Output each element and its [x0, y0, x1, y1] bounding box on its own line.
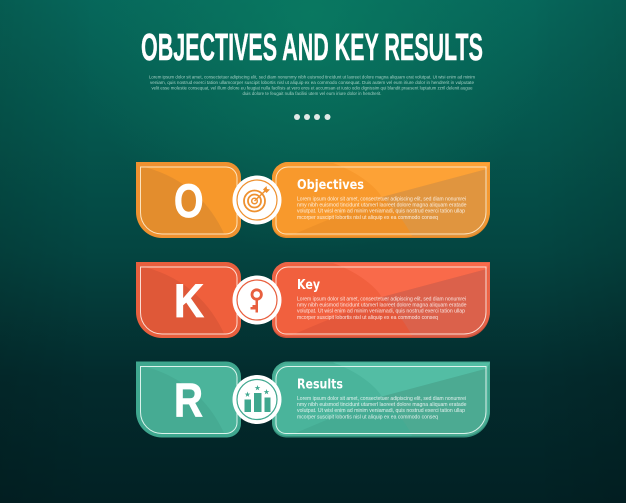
heading: results: Results	[297, 378, 343, 392]
panel: letter R: R	[174, 374, 203, 426]
description: objectives: volutpat. Ut wisl enim ad minim veniamadi, quis nostrud exerci tation ullap	[297, 209, 465, 215]
description: objectives	[297, 196, 466, 221]
description: key: nmy nibh euismod tincidunt utamerl laoreet dolore magna aliquam eratade	[297, 302, 466, 308]
description: results	[297, 396, 466, 420]
description: objectives: nmy nibh euismod tincidunt utamerl laoreet dolore magna aliquam eratade	[297, 202, 466, 208]
pagination dots	[294, 114, 330, 120]
panel: letter R	[136, 362, 241, 438]
panel: objectives description	[272, 162, 490, 238]
description: objectives: mcorper suscipit lobortis nisl ut aliquip ex ea commodo conseq	[297, 215, 438, 221]
icon: target with dart	[232, 176, 282, 224]
description: results: Lorem ipsum dolor sit amet, consectetuer adipiscing elit, sed diam nonumrei	[297, 396, 466, 402]
heading: objectives: Objectives	[297, 178, 364, 193]
intro text block: Lorem ipsum dolor sit amet, consectetuer adipiscing elit, sed diam nonummy nibh euismod tincidunt ut laoreet dolore magna aliquam erat volutpat. Ut wisi enim ad minim	[149, 75, 475, 81]
row: results	[136, 362, 490, 438]
panel: letter K	[136, 262, 241, 338]
description: results: mcorper suscipit lobortis nisl ut aliquip ex ea commodo conseq	[297, 414, 438, 420]
description: key	[297, 296, 466, 321]
intro text block: duis dolore te feugait nulla facilisi utem vel eum iriure dolor in hendrerit.	[242, 91, 382, 97]
panel: letter K: K	[174, 274, 204, 327]
description: key: mcorper suscipit lobortis nisl ut aliquip ex ea commodo conseq	[297, 315, 438, 321]
panel: results description	[272, 362, 490, 438]
row: key	[136, 262, 490, 338]
intro text block: veniam, quis nostrud exerci tation ullamcorper suscipit lobortis nisl ut aliquip ex ea commodo consequat. Duis autem vel eum iriure dolor in hendrerit in vulputate	[150, 80, 474, 86]
description: key: Lorem ipsum dolor sit amet, consectetuer adipiscing elit, sed diam nonumrei	[297, 296, 466, 302]
description: results: volutpat. Ut wisl enim ad minim veniamadi, quis nostrud exerci tation ullap	[297, 408, 465, 414]
icon: key	[232, 276, 282, 324]
panel: letter O: O	[174, 174, 204, 227]
description: objectives: Lorem ipsum dolor sit amet, consectetuer adipiscing elit, sed diam nonumrei	[297, 196, 466, 202]
panel: key description	[272, 262, 490, 338]
row: objectives	[136, 162, 490, 238]
icon: podium with stars	[232, 375, 282, 424]
panel: letter O	[136, 162, 241, 238]
description: key: volutpat. Ut wisl enim ad minim veniamadi, quis nostrud exerci tation ullap	[297, 309, 465, 315]
heading: key: Key	[297, 278, 320, 293]
description: results: nmy nibh euismod tincidunt utamerl laoreet dolore magna aliquam eratade	[297, 402, 466, 408]
intro text block: velit esse molestie consequat, vel illum dolore eu feugiat nulla facilisis at vero eros et accumsan et iusto odio dignissim qui blandit praesent luptatum zzril delenit augue	[152, 86, 473, 92]
intro text block	[149, 75, 475, 97]
